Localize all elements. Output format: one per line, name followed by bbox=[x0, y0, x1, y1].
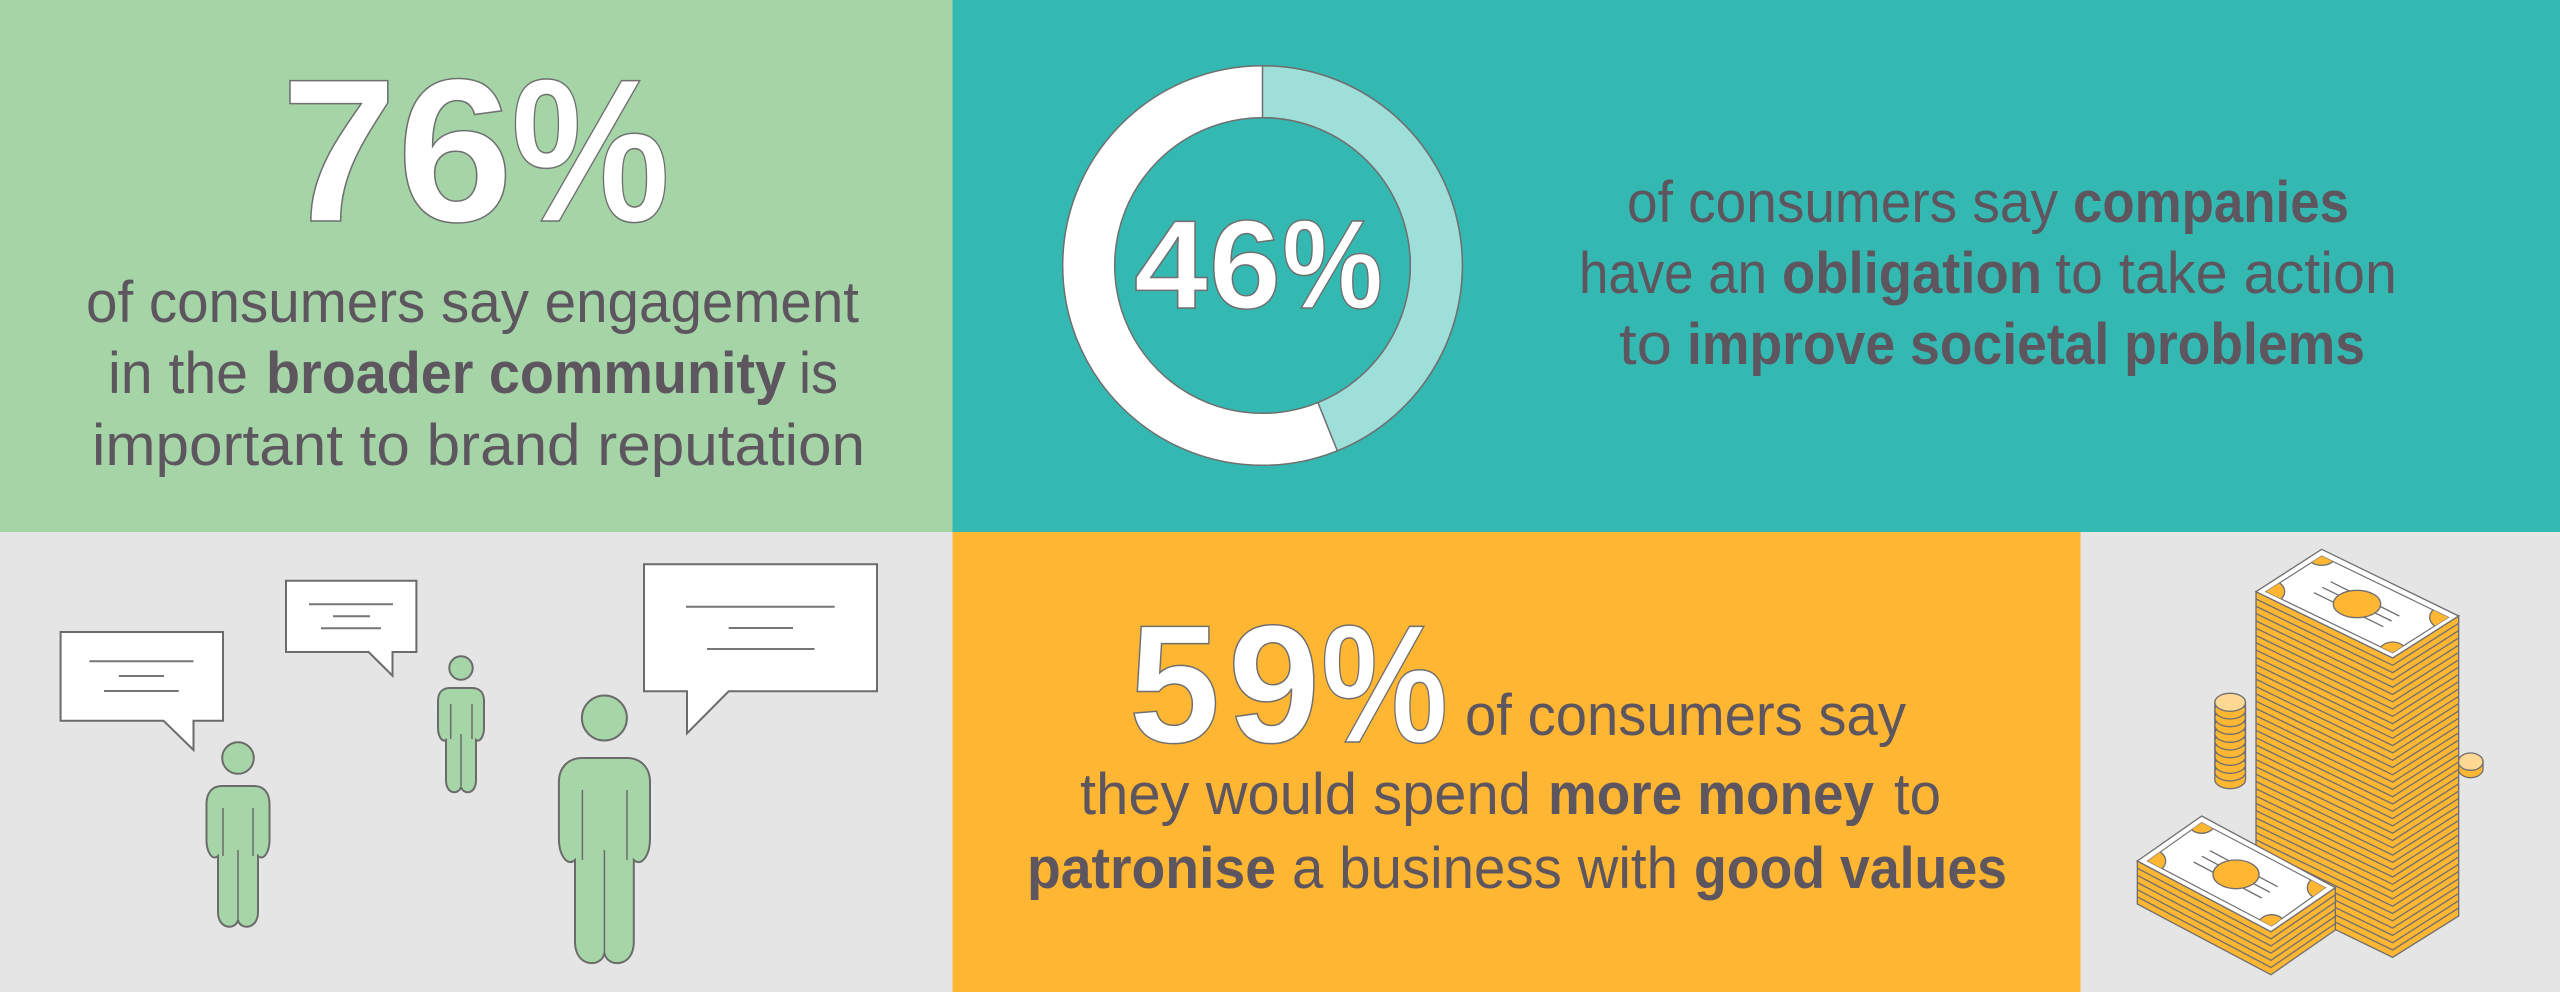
text block: spending statement: to bbox=[1894, 762, 1941, 827]
text block: spending statement bbox=[1027, 683, 2007, 901]
big number: 59%: % bbox=[1321, 590, 1448, 778]
tall stack of banknotes bbox=[2247, 547, 2467, 957]
panel: teal obligation statistic bbox=[952, 0, 2560, 532]
donut label bbox=[1134, 194, 1383, 335]
donut label: % bbox=[1282, 194, 1383, 335]
big number: 76%: 7 bbox=[281, 37, 397, 265]
text block: obligation statement: have an bbox=[1579, 241, 1767, 306]
person middle bbox=[438, 656, 484, 792]
donut label: 6 bbox=[1209, 194, 1281, 335]
text block: spending statement: of consumers say bbox=[1465, 683, 1906, 748]
big number: 76%: % bbox=[511, 37, 670, 265]
text block: community statement bbox=[86, 270, 865, 478]
text block: obligation statement: of consumers say bbox=[1627, 170, 2058, 235]
panel: green community statistic bbox=[0, 0, 952, 532]
text block: community statement: of consumers say engagement bbox=[86, 270, 859, 335]
icon: people talking illustration bbox=[61, 564, 877, 963]
text block: obligation statement bbox=[1579, 170, 2397, 377]
text block: obligation statement: improve societal problems bbox=[1687, 312, 2365, 377]
short stack of banknotes bbox=[2130, 812, 2343, 975]
text block: obligation statement: to bbox=[1619, 312, 1672, 377]
text block: community statement: in the bbox=[108, 341, 248, 406]
single coin bbox=[2458, 753, 2483, 778]
text block: community statement: is bbox=[799, 341, 838, 406]
icon: money stacks and coins bbox=[2130, 547, 2483, 975]
big number: 76%: 6 bbox=[397, 37, 513, 265]
big number: 76% bbox=[281, 37, 670, 265]
text block: spending statement: patronise bbox=[1027, 836, 1276, 901]
speech bubble middle bbox=[286, 581, 416, 676]
text block: obligation statement: companies bbox=[2073, 170, 2349, 235]
text block: obligation statement: to take action bbox=[2055, 241, 2397, 306]
big number: 59% bbox=[1129, 590, 1448, 778]
text block: community statement: important to brand reputation bbox=[92, 413, 865, 478]
big number: 59%: 9 bbox=[1228, 590, 1320, 778]
person left bbox=[206, 742, 270, 927]
text block: obligation statement: obligation bbox=[1782, 241, 2042, 306]
speech bubble left bbox=[61, 632, 223, 750]
speech bubble right bbox=[644, 564, 877, 733]
donut chart: 46% bbox=[1063, 66, 1462, 465]
panel: orange spending statistic bbox=[952, 532, 2080, 992]
text block: spending statement: good values bbox=[1694, 836, 2007, 901]
text block: spending statement: they would spend bbox=[1080, 762, 1531, 827]
text block: spending statement: a business with bbox=[1292, 836, 1678, 901]
big number: 59%: 5 bbox=[1129, 590, 1220, 778]
donut label: 4 bbox=[1134, 194, 1208, 335]
text block: spending statement: more money bbox=[1548, 762, 1874, 827]
person right bbox=[559, 696, 650, 963]
coin stack bbox=[2215, 693, 2245, 789]
text block: community statement: broader community bbox=[266, 341, 786, 406]
